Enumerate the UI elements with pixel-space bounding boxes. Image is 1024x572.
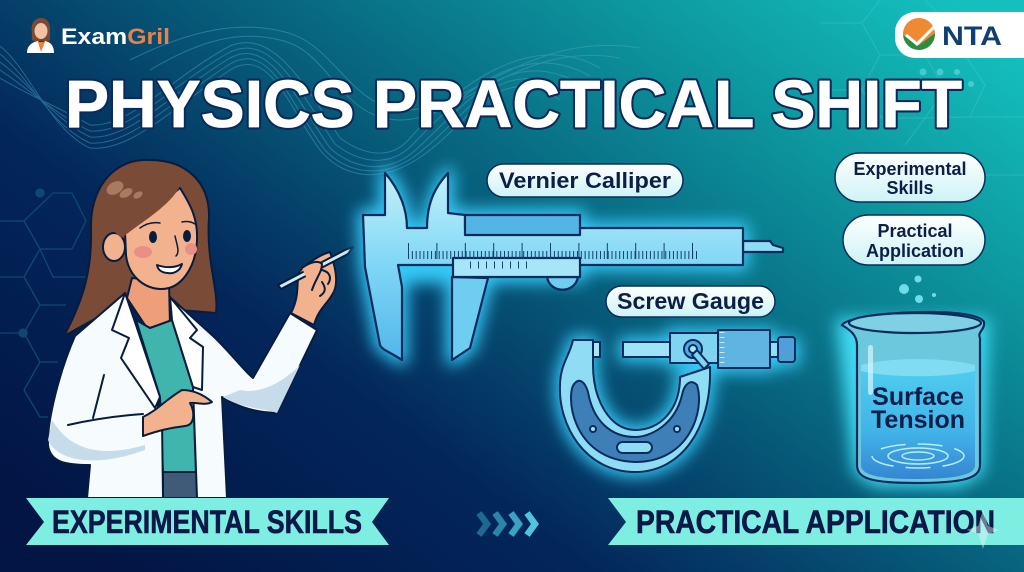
lab coat left: [48, 293, 163, 498]
pill: Experimental Skills: Experimental: [853, 159, 967, 179]
beaker: [840, 312, 985, 483]
ribbon: Experimental Skills: [26, 498, 389, 545]
label: Vernier Calliper: Vernier Calliper: [499, 168, 671, 193]
fringe: [108, 169, 180, 238]
lower hand: [143, 390, 212, 436]
pill: Practical Application: Practical: [877, 221, 953, 241]
title: PHYSICS PRACTICAL SHIFT: [65, 67, 962, 142]
thumb wheel: [547, 277, 578, 290]
glass highlight: [868, 345, 873, 395]
hair back: [64, 160, 216, 336]
anvil: [593, 342, 600, 357]
frame plate: [571, 381, 699, 462]
title: PHYSICS PRACTICAL SHIFT: [65, 67, 962, 142]
gauge glow: [560, 333, 795, 472]
water: [861, 359, 975, 479]
fixed jaws and beam: [363, 173, 743, 360]
eyebrows and nose: [140, 222, 195, 256]
NTA badge: [895, 12, 1024, 58]
scientist character: [48, 160, 353, 498]
wave lines: [0, 27, 640, 175]
lock ring: [684, 340, 702, 358]
NTA label: NTA: [942, 21, 1002, 51]
pill: Practical Application: [843, 215, 985, 265]
scale ticks: [408, 251, 697, 265]
decorative dots near NTA: [920, 68, 974, 87]
lower jaw: [452, 277, 488, 360]
neck: [127, 278, 170, 328]
gauge body: [560, 330, 795, 472]
pill: Practical Application: Application: [866, 241, 964, 261]
icon: scientist avatar: [27, 18, 54, 53]
coat shadow: [223, 365, 300, 413]
icon: NTA tick logo: [903, 18, 935, 50]
raised-hand fingers: [302, 262, 330, 296]
water surface: [861, 359, 975, 376]
arrow chevrons: [479, 513, 535, 535]
lock lever: [692, 350, 709, 369]
thimble: [718, 330, 770, 368]
eyes: [149, 230, 191, 243]
pen: [278, 247, 353, 289]
sparkle watermark: [967, 510, 999, 549]
spindle: [623, 342, 670, 357]
screw gauge: [560, 330, 795, 472]
plate holes and slot: [590, 426, 596, 432]
cheeks: [134, 243, 197, 258]
left sleeve fold: [68, 375, 143, 425]
bubbles: [899, 276, 936, 303]
raised hand: [291, 252, 336, 325]
beaker glow: [840, 322, 985, 483]
ratchet: [778, 337, 795, 362]
ribbon: Experimental Skills: EXPERIMENTAL SKILLS: [52, 504, 362, 540]
calliper body: [363, 173, 783, 360]
beaker label: Surface: [872, 383, 964, 411]
pill: Experimental Skills: Skills: [886, 178, 934, 198]
beaker: Tension: [871, 406, 965, 434]
t-shirt: [136, 320, 196, 473]
label: Screw Gauge: Screw Gauge: [617, 288, 764, 314]
mouth: [157, 264, 182, 273]
depth rod: [743, 241, 783, 252]
rim: [849, 313, 981, 333]
hair highlights: [104, 178, 144, 200]
C frame: [560, 340, 710, 472]
hexagon pattern top right: [820, 0, 1024, 175]
pill: Experimental Skills: [835, 153, 985, 202]
lower slider: [453, 258, 580, 277]
stem: [770, 342, 779, 357]
calliper glow: [363, 173, 743, 360]
trousers: [163, 472, 199, 498]
face: [125, 188, 197, 289]
label: Vernier Calliper: [487, 164, 683, 197]
thimble ticks: [720, 332, 724, 366]
lab coat right and arm: [170, 297, 317, 498]
top slider: [465, 215, 580, 235]
barrel: [670, 333, 720, 363]
hexagon pattern left: [0, 189, 86, 417]
beaker glass: [842, 312, 984, 483]
vernier calliper: [363, 173, 783, 360]
ear: [103, 233, 125, 261]
wordmark: Exam Gril: [61, 24, 170, 49]
lapels: [112, 293, 203, 408]
brand logo: ExamGril: [27, 18, 170, 53]
ripples: [872, 444, 964, 468]
